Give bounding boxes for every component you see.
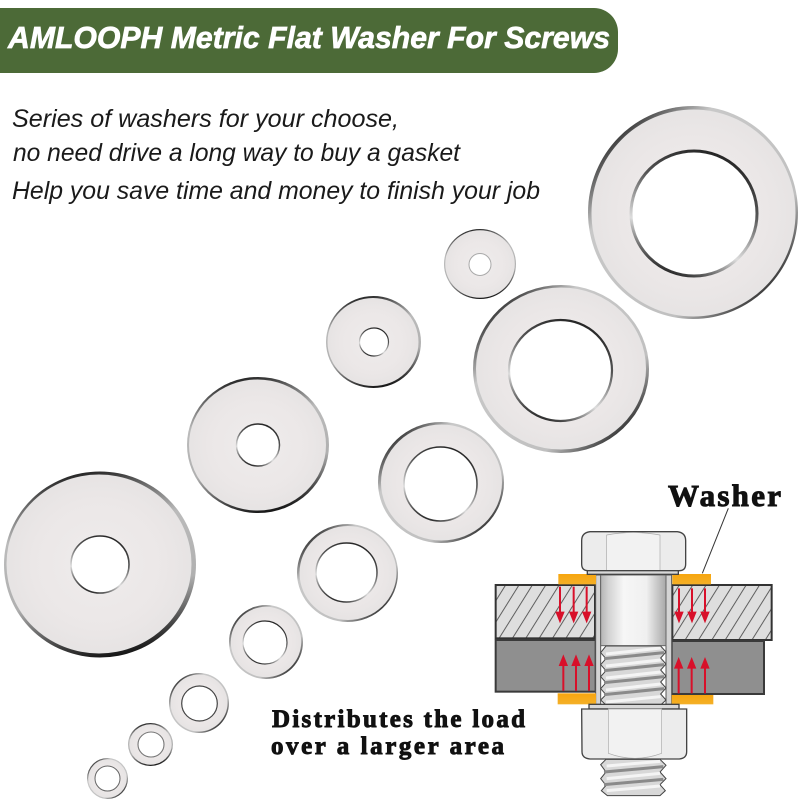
nut bbox=[582, 704, 687, 759]
washer: flat M6 bbox=[128, 723, 173, 766]
washer: flat M16 bbox=[378, 422, 504, 543]
intro text block: no need drive a long way to buy a gasket bbox=[13, 139, 461, 167]
intro text block bbox=[12, 105, 540, 205]
title banner: AMLOOPH Metric Flat Washer For Screws bbox=[7, 20, 610, 55]
lower plates grey bbox=[496, 640, 764, 694]
washer: large wide-hole top right bbox=[588, 106, 798, 319]
bolt and washer cross-section diagram bbox=[496, 508, 772, 796]
bolt shank bbox=[601, 575, 666, 646]
washer label: Washer bbox=[668, 478, 781, 513]
load distribution caption: Distributes the load bbox=[272, 706, 525, 733]
washer: flat M5 bbox=[87, 758, 128, 799]
washer: medium wide-hole bbox=[473, 285, 649, 453]
load distribution caption: over a larger area bbox=[271, 733, 504, 760]
washer: flat M10 bbox=[229, 605, 303, 679]
title banner bbox=[0, 8, 618, 73]
washer: large fender bbox=[187, 377, 329, 513]
upper thread bbox=[601, 646, 666, 705]
washer leader line bbox=[702, 508, 728, 573]
washer: medium fender bbox=[326, 296, 421, 388]
intro text block: Help you save time and money to finish your job bbox=[12, 177, 540, 205]
upper plates hatched bbox=[496, 585, 772, 640]
washer: flat M12 bbox=[297, 524, 398, 622]
orange washers bbox=[558, 574, 713, 704]
lower thread end bbox=[601, 759, 666, 796]
load distribution caption bbox=[271, 706, 525, 760]
washer: flat M8 bbox=[169, 673, 229, 733]
washer: small fender bbox=[444, 229, 516, 299]
intro text block: Series of washers for your choose, bbox=[12, 105, 399, 133]
washer: largest fender bbox=[4, 472, 196, 658]
clearance gap around bolt bbox=[596, 575, 672, 704]
red load arrows bbox=[555, 587, 710, 693]
bolt head bbox=[582, 532, 686, 574]
